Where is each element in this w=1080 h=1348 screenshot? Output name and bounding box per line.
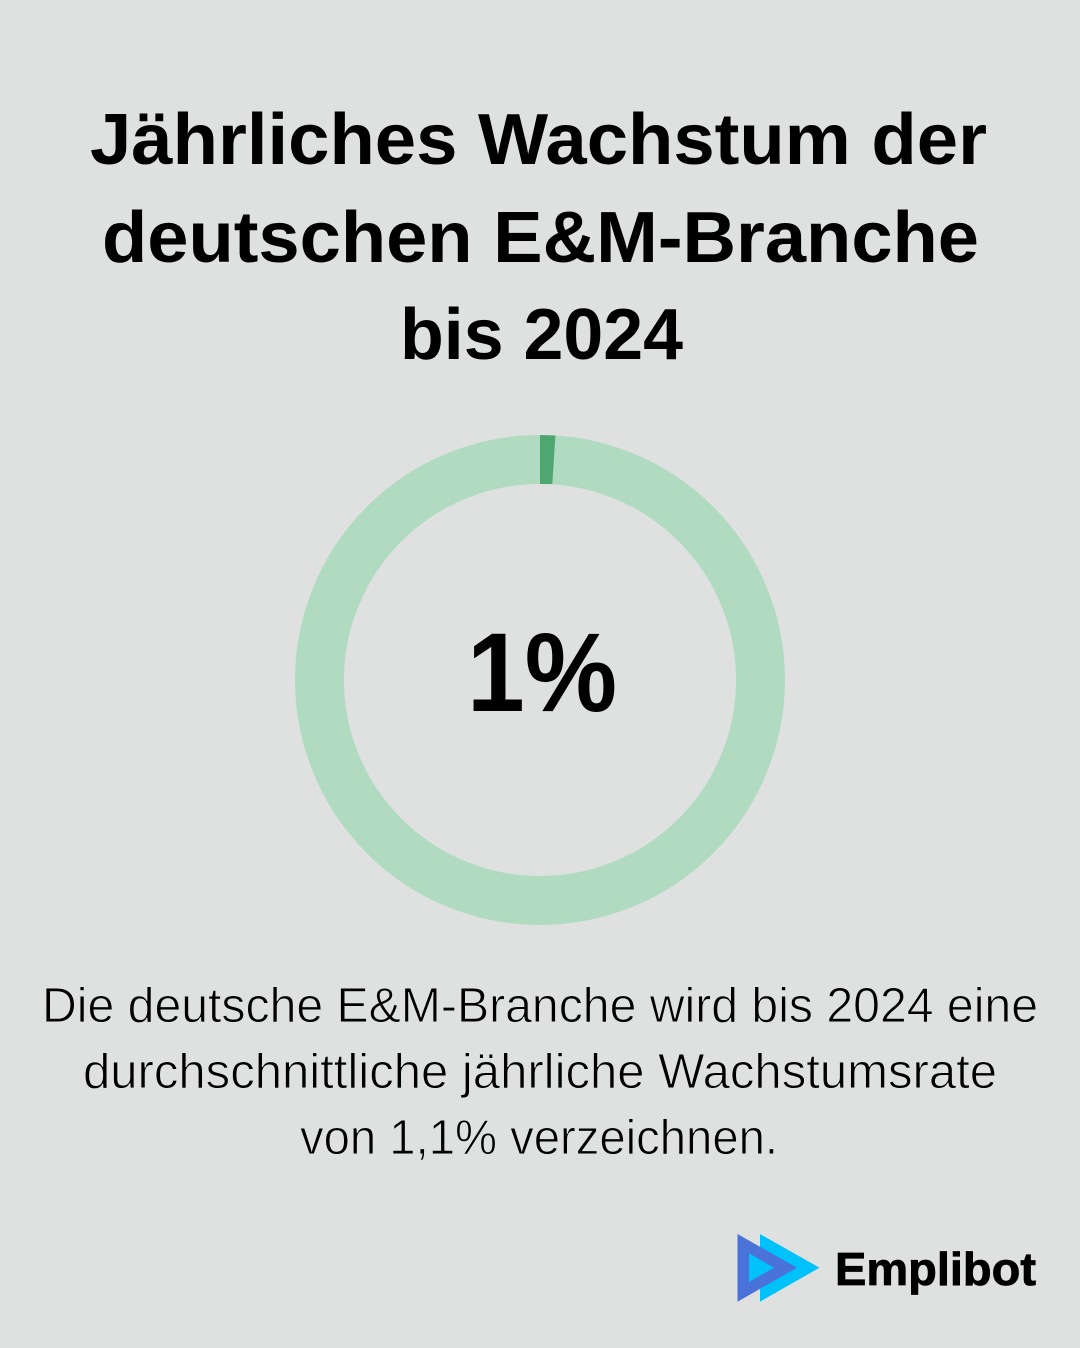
description text: durchschnittliche jährliche Wachstumsrate xyxy=(83,1045,997,1099)
title: bis 2024 xyxy=(400,295,683,375)
title xyxy=(90,100,987,375)
description text: von 1,1% verzeichnen. xyxy=(300,1111,778,1165)
donut value label: 1% xyxy=(467,610,617,735)
description text: Die deutsche E&M-Branche wird bis 2024 eine xyxy=(42,979,1038,1033)
icon: play triangles xyxy=(738,1234,820,1302)
donut track xyxy=(320,460,760,900)
title: Jährliches Wachstum der xyxy=(90,100,987,180)
title: deutschen E&M-Branche xyxy=(102,198,979,278)
donut value segment xyxy=(540,435,555,484)
donut chart xyxy=(320,435,760,900)
description text xyxy=(42,979,1038,1165)
logo wordmark: Emplibot xyxy=(835,1243,1036,1295)
logo: Emplibot xyxy=(738,1234,1036,1302)
